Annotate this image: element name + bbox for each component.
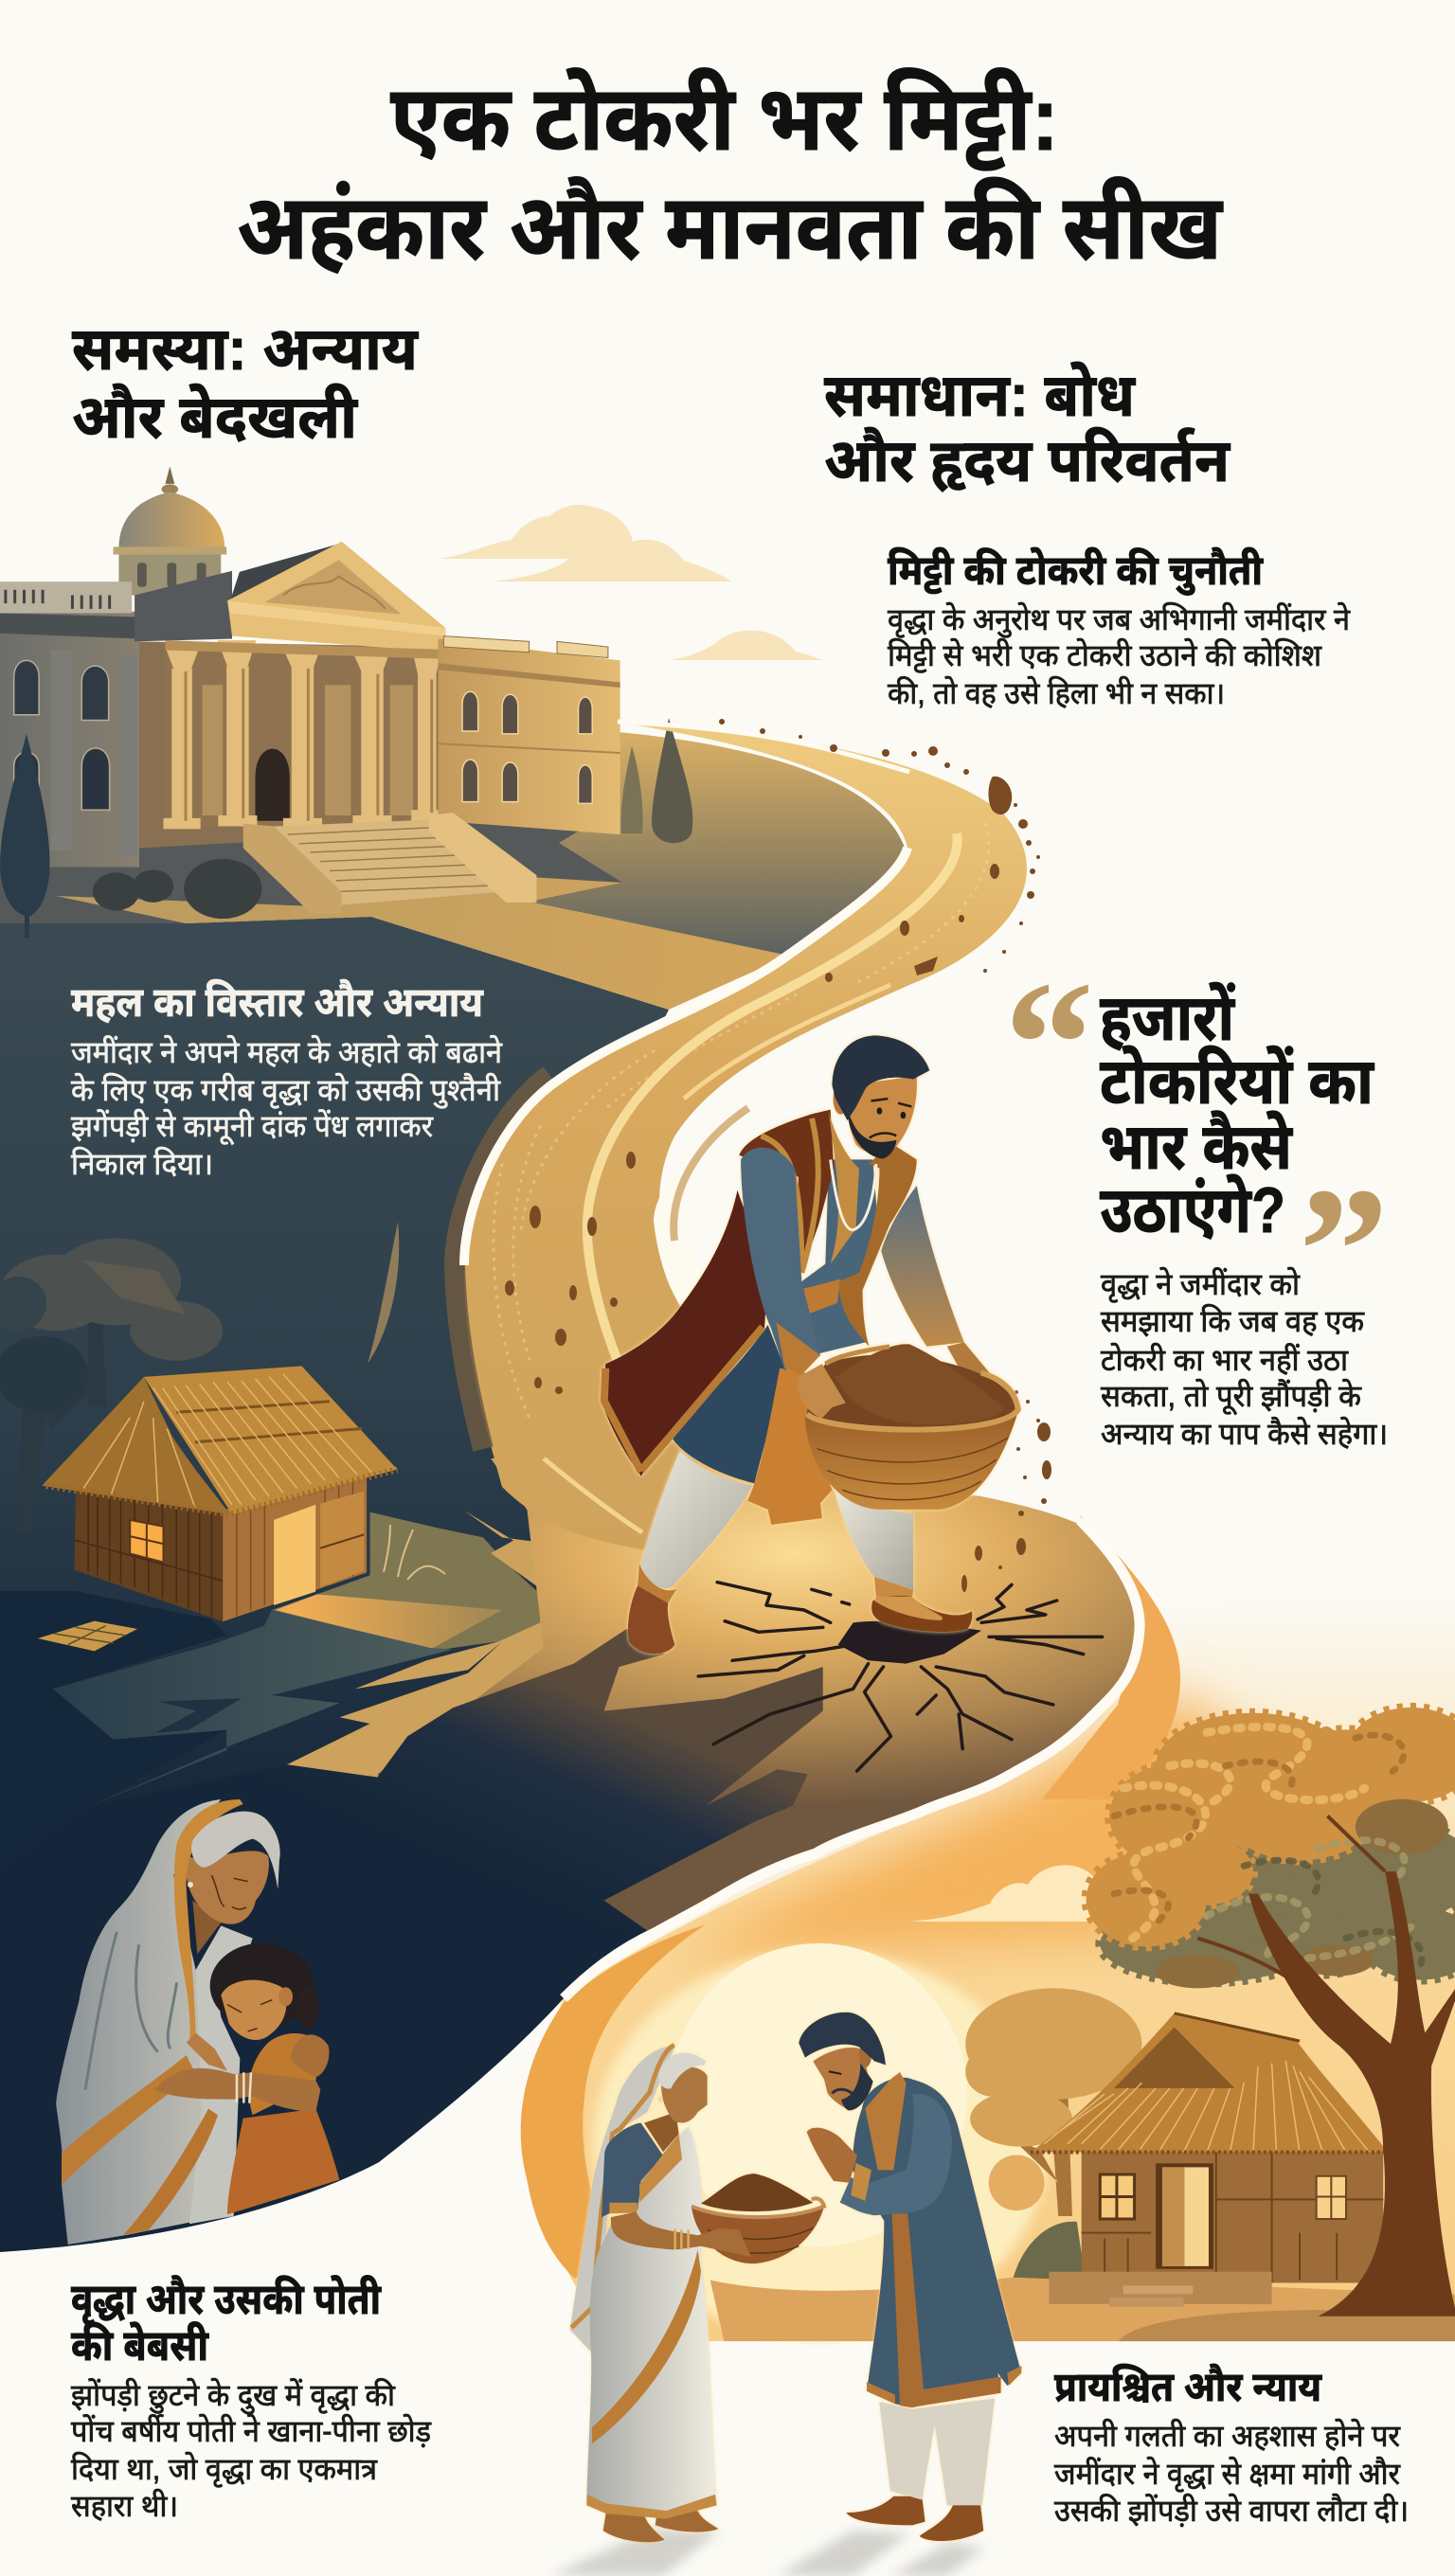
basket — [692, 2207, 824, 2263]
sandy ribbon path — [368, 722, 1027, 1553]
ground hills — [710, 2278, 1455, 2341]
coat — [853, 2078, 1021, 2407]
earth particles — [505, 719, 1051, 1592]
title: अहंकार और मानवता की सीख — [237, 176, 1224, 278]
text block: old woman's explanation: समझाया कि जब वह एक — [1101, 1304, 1365, 1338]
sun glow — [593, 1951, 1048, 2339]
quote text: उठाएंगे? — [1100, 1174, 1285, 1246]
text block: old woman and granddaughter: झोंपड़ी छुटने के दुख में वृद्धा की — [71, 2378, 396, 2415]
heading: problem — [72, 316, 419, 451]
trunk — [1248, 1871, 1455, 2317]
text block: old woman's explanation: वृद्धा ने जमींदार को — [1101, 1267, 1301, 1303]
text block: atonement and justice — [1054, 2364, 1409, 2528]
woman's arms — [187, 2033, 227, 2071]
golden haze beside the stripe — [663, 1695, 1298, 1960]
text block: the basket challenge — [888, 547, 1351, 710]
orange crescent around the sun — [521, 1924, 706, 2279]
text block: old woman's explanation: टोकरी का भार नहीं उठा — [1101, 1343, 1349, 1377]
quote text: भार कैसे — [1100, 1111, 1294, 1183]
quote mark: opening: “ — [1004, 945, 1094, 1144]
heading: solution: समाधान: बोध — [824, 363, 1136, 429]
hut restored to the old woman and scene ground — [710, 2013, 1455, 2341]
windows — [1100, 2174, 1135, 2219]
head — [813, 2048, 870, 2110]
right arm — [881, 1186, 964, 1347]
roof — [1031, 2013, 1388, 2153]
text block: old woman's explanation: अन्याय का पाप कैसे सहेगा। — [1101, 1417, 1388, 1451]
head — [661, 2066, 708, 2122]
roof and central mass — [135, 571, 232, 641]
face and hair — [187, 1851, 269, 1924]
dupatta — [602, 1190, 768, 1476]
left wing — [0, 581, 139, 868]
text block: the basket challenge: मिट्टी से भरी एक टोकरी उठाने की कोशिश — [888, 638, 1322, 673]
pediment — [227, 542, 445, 653]
text block: old woman and granddaughter: सहारा थी। — [71, 2489, 178, 2523]
door — [1156, 2163, 1213, 2269]
cloud: dawn sky — [909, 1865, 1137, 1922]
heading: solution — [824, 363, 1230, 494]
ground layer: shadows, lit earth, cracks — [0, 1458, 1135, 2248]
vest — [739, 1110, 834, 1273]
road — [56, 877, 789, 1010]
heading: solution: और हृदय परिवर्तन — [824, 427, 1230, 494]
tan sliver — [287, 1458, 544, 1777]
dark slate ground — [0, 917, 1140, 2252]
background tree in the dawn scene — [965, 1988, 1141, 2285]
text block: palace expansion: के लिए एक गरीब वृद्धा को उसकी पुश्तैनी — [71, 1073, 501, 1109]
text block: the basket challenge: की, तो वह उसे हिला भी न सका। — [888, 676, 1225, 710]
text block: atonement and justice: अपनी गलती का अहशास होने पर — [1054, 2419, 1401, 2453]
text block: atonement and justice: जमींदार ने वृद्धा से क्षमा मांगी और — [1054, 2457, 1401, 2493]
text block: old woman and granddaughter: पोंच बर्षीय पोती ने खाना-पीना छोड़ — [71, 2414, 432, 2448]
columns — [163, 640, 442, 829]
lit earth — [377, 1461, 1135, 1930]
navy shapes in the shade — [154, 1698, 242, 1733]
legs — [641, 1451, 753, 1588]
basket — [805, 1412, 1018, 1510]
old woman holding the basket — [570, 2045, 824, 2542]
thrown roof tiles — [38, 1621, 137, 1651]
grand steps — [243, 813, 536, 913]
girl dress — [227, 2109, 339, 2214]
text block: old woman and granddaughter: की बेबसी — [71, 2321, 209, 2370]
tree behind the hut — [0, 1239, 223, 1532]
kurta — [670, 1325, 784, 1483]
ground shadows of the couple — [549, 2529, 985, 2576]
large tree with autumn foliage — [1087, 1708, 1455, 2317]
pale flowing streaks — [587, 833, 958, 1421]
heading: problem: समस्या: अन्याय — [72, 316, 419, 383]
quote text: टोकरियों का — [1100, 1046, 1375, 1118]
man's long shadow — [0, 1629, 823, 2247]
sleeve — [840, 2094, 952, 2215]
hut: left side, dispossessed home — [42, 1366, 397, 1621]
platform and steps — [1049, 2272, 1272, 2304]
text block: palace expansion: जमींदार ने अपने महल के अहाते को बढाने — [71, 1035, 503, 1069]
title — [237, 68, 1224, 278]
orange sash — [747, 1368, 832, 1525]
landlord bowing in apology — [799, 2012, 1021, 2541]
folded hands — [807, 2128, 857, 2183]
girl head — [210, 1943, 314, 2029]
quote text: हजारों — [1100, 982, 1236, 1054]
wall — [1082, 2150, 1383, 2282]
text block: palace expansion: महल का विस्तार और अन्याय — [71, 979, 484, 1026]
text block: palace expansion: झगेंपड़ी से कामूनी दांक पेंध लगाकर — [71, 1109, 434, 1145]
veil and sari — [56, 1799, 221, 2245]
dhoti — [879, 2398, 995, 2505]
orange crescent at the top of the path — [1042, 1515, 1180, 1799]
brown halo and white edge line — [455, 1075, 549, 1449]
dome — [114, 466, 226, 596]
dry grass tuft — [384, 1525, 445, 1580]
inner white swirl beside the man — [654, 1099, 758, 1312]
text block: old woman and granddaughter — [71, 2275, 432, 2523]
quote mark: closing: ” — [1299, 1152, 1389, 1351]
navy shade left of the yard — [0, 1591, 225, 1716]
foliage — [1100, 1818, 1455, 1983]
head — [848, 1075, 917, 1154]
elderly woman embracing her granddaughter — [56, 1799, 339, 2245]
veil — [570, 2045, 675, 2352]
text block: palace expansion: निकाल दिया। — [71, 1147, 213, 1181]
speckle along the ribbon — [494, 824, 989, 1421]
arm and bangles — [611, 2211, 751, 2257]
olive yard near the hut — [272, 1512, 544, 1651]
title: एक टोकरी भर मिट्टी: — [390, 68, 1059, 171]
text block: atonement and justice: प्रायश्चित और न्याय — [1054, 2364, 1322, 2410]
man carrying the basket of soil — [602, 1035, 1018, 1654]
ground behind the palace — [0, 814, 663, 923]
portico — [139, 641, 441, 848]
white path stripe — [564, 1520, 1140, 1998]
feet — [846, 2496, 925, 2525]
sky: warm dawn scene behind the lower right — [521, 1515, 1455, 2341]
door light on the ground — [276, 1594, 502, 1650]
ground cracks — [698, 1583, 1103, 1771]
feet — [603, 2511, 665, 2542]
text block: old woman and granddaughter: वृद्धा और उसकी पोती — [71, 2275, 382, 2325]
text block: old woman and granddaughter: दिया था, जो वृद्धा का एकमात्र — [71, 2452, 378, 2488]
right wing — [439, 638, 620, 834]
illustration: palace grounds and dark landscape — [0, 731, 1140, 2252]
text block: the basket challenge: मिट्टी की टोकरी की चुनौती — [888, 547, 1264, 595]
leaf texture — [1114, 1726, 1422, 1966]
left arm — [741, 1148, 820, 1370]
text block: old woman's explanation: सकता, तो पूरी झौंपड़ी के — [1101, 1379, 1362, 1415]
blouse — [602, 2123, 663, 2217]
heading: problem: और बेदखली — [72, 384, 358, 451]
dark streak accents on the slate — [368, 1222, 399, 1364]
text block: atonement and justice: उसकी झोंपड़ी उसे वापरा लौटा दी। — [1054, 2494, 1409, 2528]
text block: old woman's explanation — [1101, 1267, 1388, 1451]
field — [530, 731, 905, 957]
bushes — [93, 859, 261, 919]
cloud: upper sky — [436, 505, 822, 660]
thatch roof — [144, 1366, 397, 1514]
quote text — [1100, 982, 1375, 1246]
sari — [586, 2126, 717, 2519]
grey-blue shaded patch — [53, 1610, 453, 1806]
palace — [0, 466, 620, 919]
cypress trees — [0, 718, 692, 938]
text block: the basket challenge: वृद्धा के अनुरोथ पर जब अभिगानी जमींदार ने — [888, 602, 1351, 638]
text block: palace expansion — [71, 979, 503, 1181]
